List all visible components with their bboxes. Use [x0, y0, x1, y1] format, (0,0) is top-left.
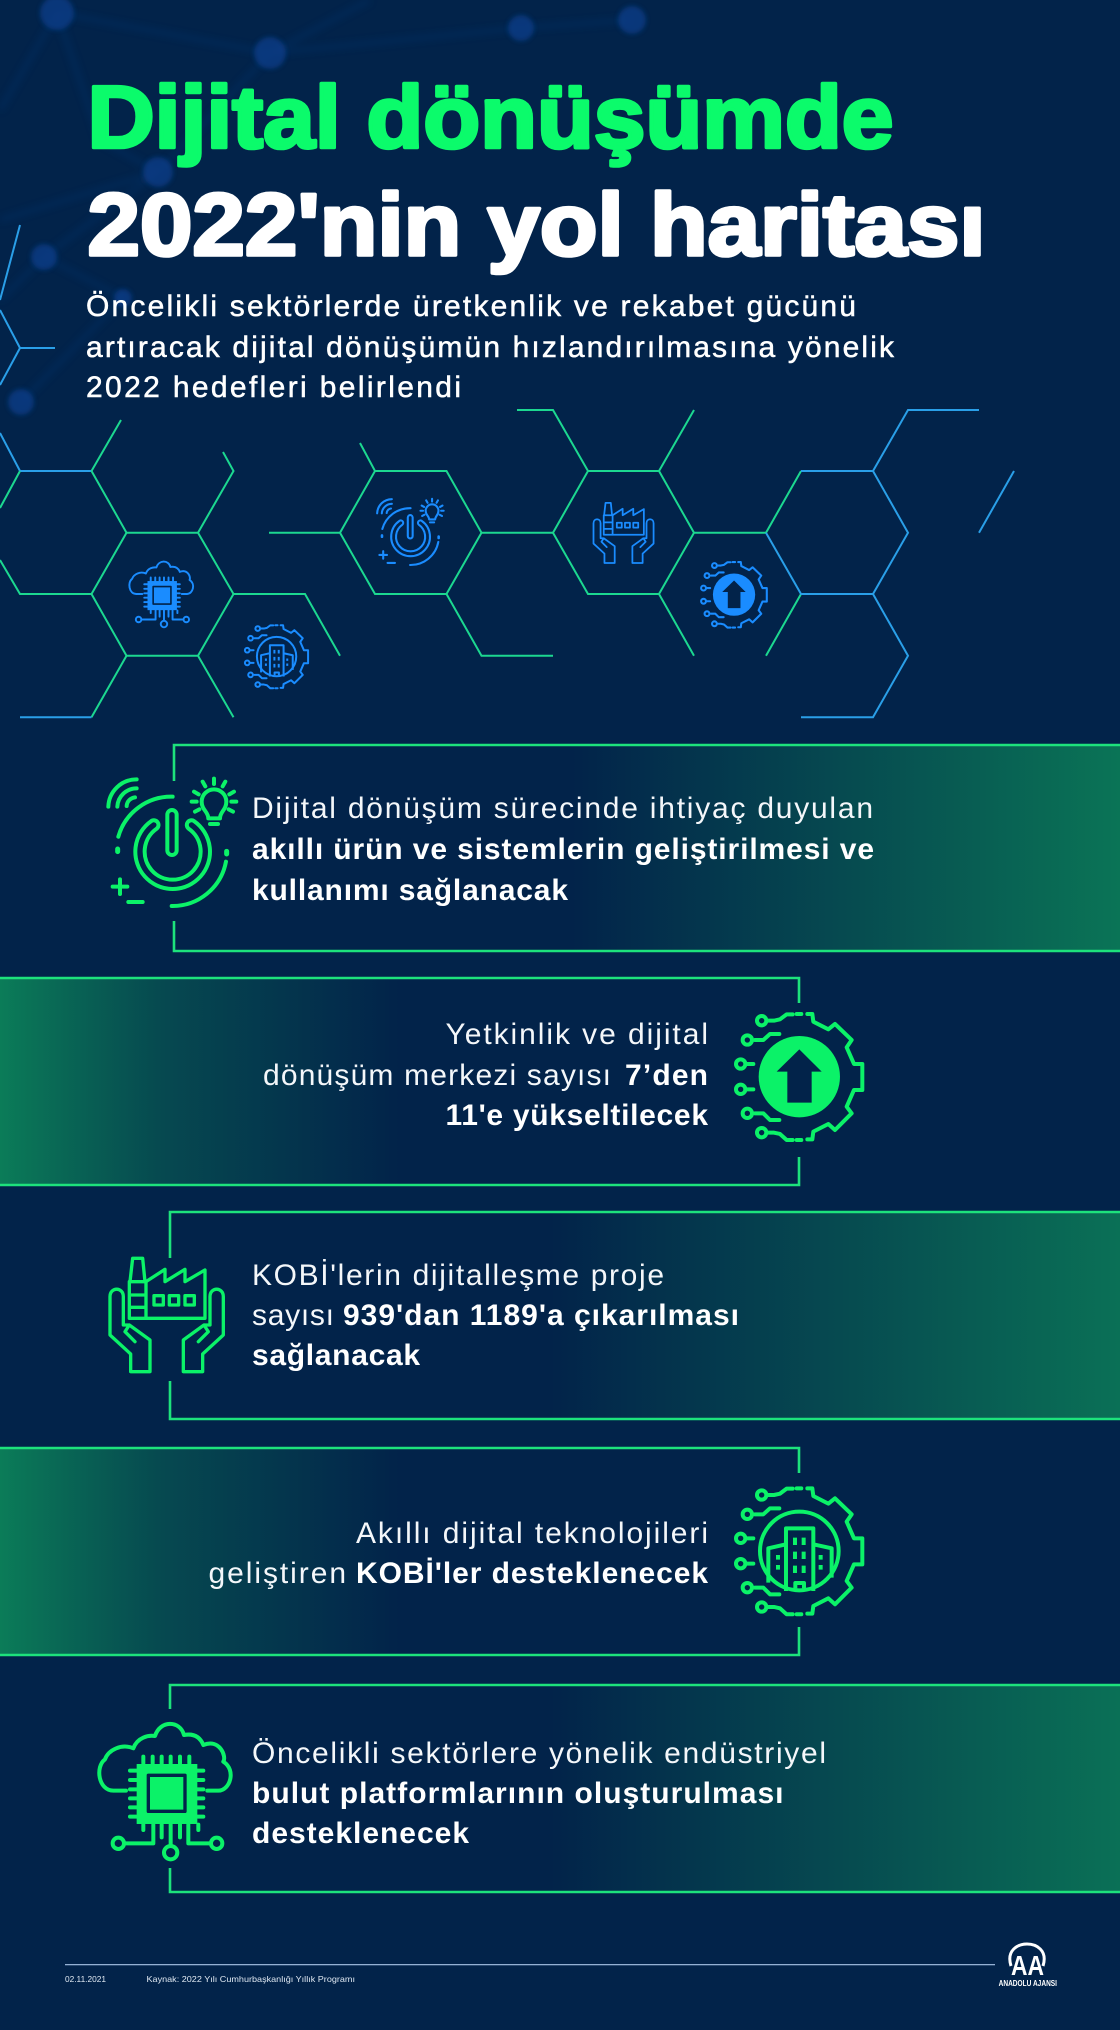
subtitle	[86, 290, 895, 404]
panel 3 text	[252, 1259, 739, 1372]
source: Kaynak: 2022 Yılı Cumhurbaşkanlığı Yıllık Programı	[146, 1974, 355, 1984]
icon: power	[108, 779, 236, 906]
panel 4 text: KOBİ'ler desteklenecek	[356, 1557, 708, 1590]
logo: ANADOLU AJANSI	[999, 1979, 1057, 1988]
date: 02.11.2021	[65, 1974, 106, 1984]
panel 1 text: Dijital dönüşüm sürecinde ihtiyaç duyulan	[252, 792, 873, 825]
panel 5 text: bulut platformlarının oluşturulması	[252, 1777, 784, 1810]
panel 5: cloud platforms	[99, 1685, 1120, 1892]
icon: building gear	[736, 1488, 862, 1614]
subtitle: artıracak dijital dönüşümün hızlandırılmasına yönelik	[86, 331, 895, 364]
panel 2 text: 11'e yükseltilecek	[446, 1099, 708, 1132]
hex icon: power	[377, 499, 444, 565]
panel 5 text: Öncelikli sektörlere yönelik endüstriyel	[252, 1737, 826, 1770]
panel 3 text: sayısı	[252, 1299, 334, 1332]
icon: arrow gear	[736, 1014, 862, 1140]
hex icon: factory hands	[594, 503, 654, 563]
panel 2 text	[263, 1018, 708, 1132]
panel 3: SME digitalisation	[110, 1212, 1120, 1419]
hexagon network	[0, 225, 1014, 717]
panel 4 text: Akıllı dijital teknolojileri	[356, 1517, 708, 1550]
panel 1 text: akıllı ürün ve sistemlerin geliştirilmesi ve	[252, 833, 874, 866]
icon: factory hands	[110, 1258, 223, 1372]
panel 4 text: geliştiren	[208, 1557, 346, 1590]
panel 3 text: 939'dan 1189'a çıkarılması	[343, 1299, 739, 1332]
panel 1 text: kullanımı sağlanacak	[252, 874, 568, 907]
panel 2 text: Yetkinlik ve dijital	[446, 1018, 708, 1051]
panel 2: competence centres	[0, 978, 862, 1185]
hex icon: building gear	[245, 625, 308, 688]
panel 2 text: dönüşüm merkezi sayısı	[263, 1059, 611, 1092]
panel 1: smart products	[108, 745, 1120, 951]
panel 1 text	[252, 792, 874, 907]
panel 3 text: KOBİ'lerin dijitalleşme proje	[252, 1259, 664, 1292]
panel 4: smart technologies	[0, 1448, 862, 1655]
hex icon: cloud chip	[129, 562, 193, 627]
subtitle: 2022 hedefleri belirlendi	[86, 371, 461, 404]
footer	[65, 1944, 1057, 1988]
panel 3 text: sağlanacak	[252, 1339, 420, 1372]
background network pattern	[0, 0, 646, 415]
icon: cloud chip	[99, 1724, 231, 1859]
panel 4 text	[208, 1517, 708, 1590]
panel 5 text	[252, 1737, 826, 1850]
logo	[999, 1944, 1057, 1988]
panel 2 text: 7’den	[625, 1059, 708, 1092]
title: Dijital dönüşümde	[88, 68, 894, 166]
subtitle: Öncelikli sektörlerde üretkenlik ve rekabet gücünü	[86, 290, 856, 323]
logo: AA	[1011, 1950, 1044, 1981]
panel 5 text: desteklenecek	[252, 1817, 469, 1850]
hex icon: arrow gear	[701, 562, 767, 628]
title: 2022'nin yol haritası	[88, 175, 985, 274]
title	[88, 68, 985, 274]
